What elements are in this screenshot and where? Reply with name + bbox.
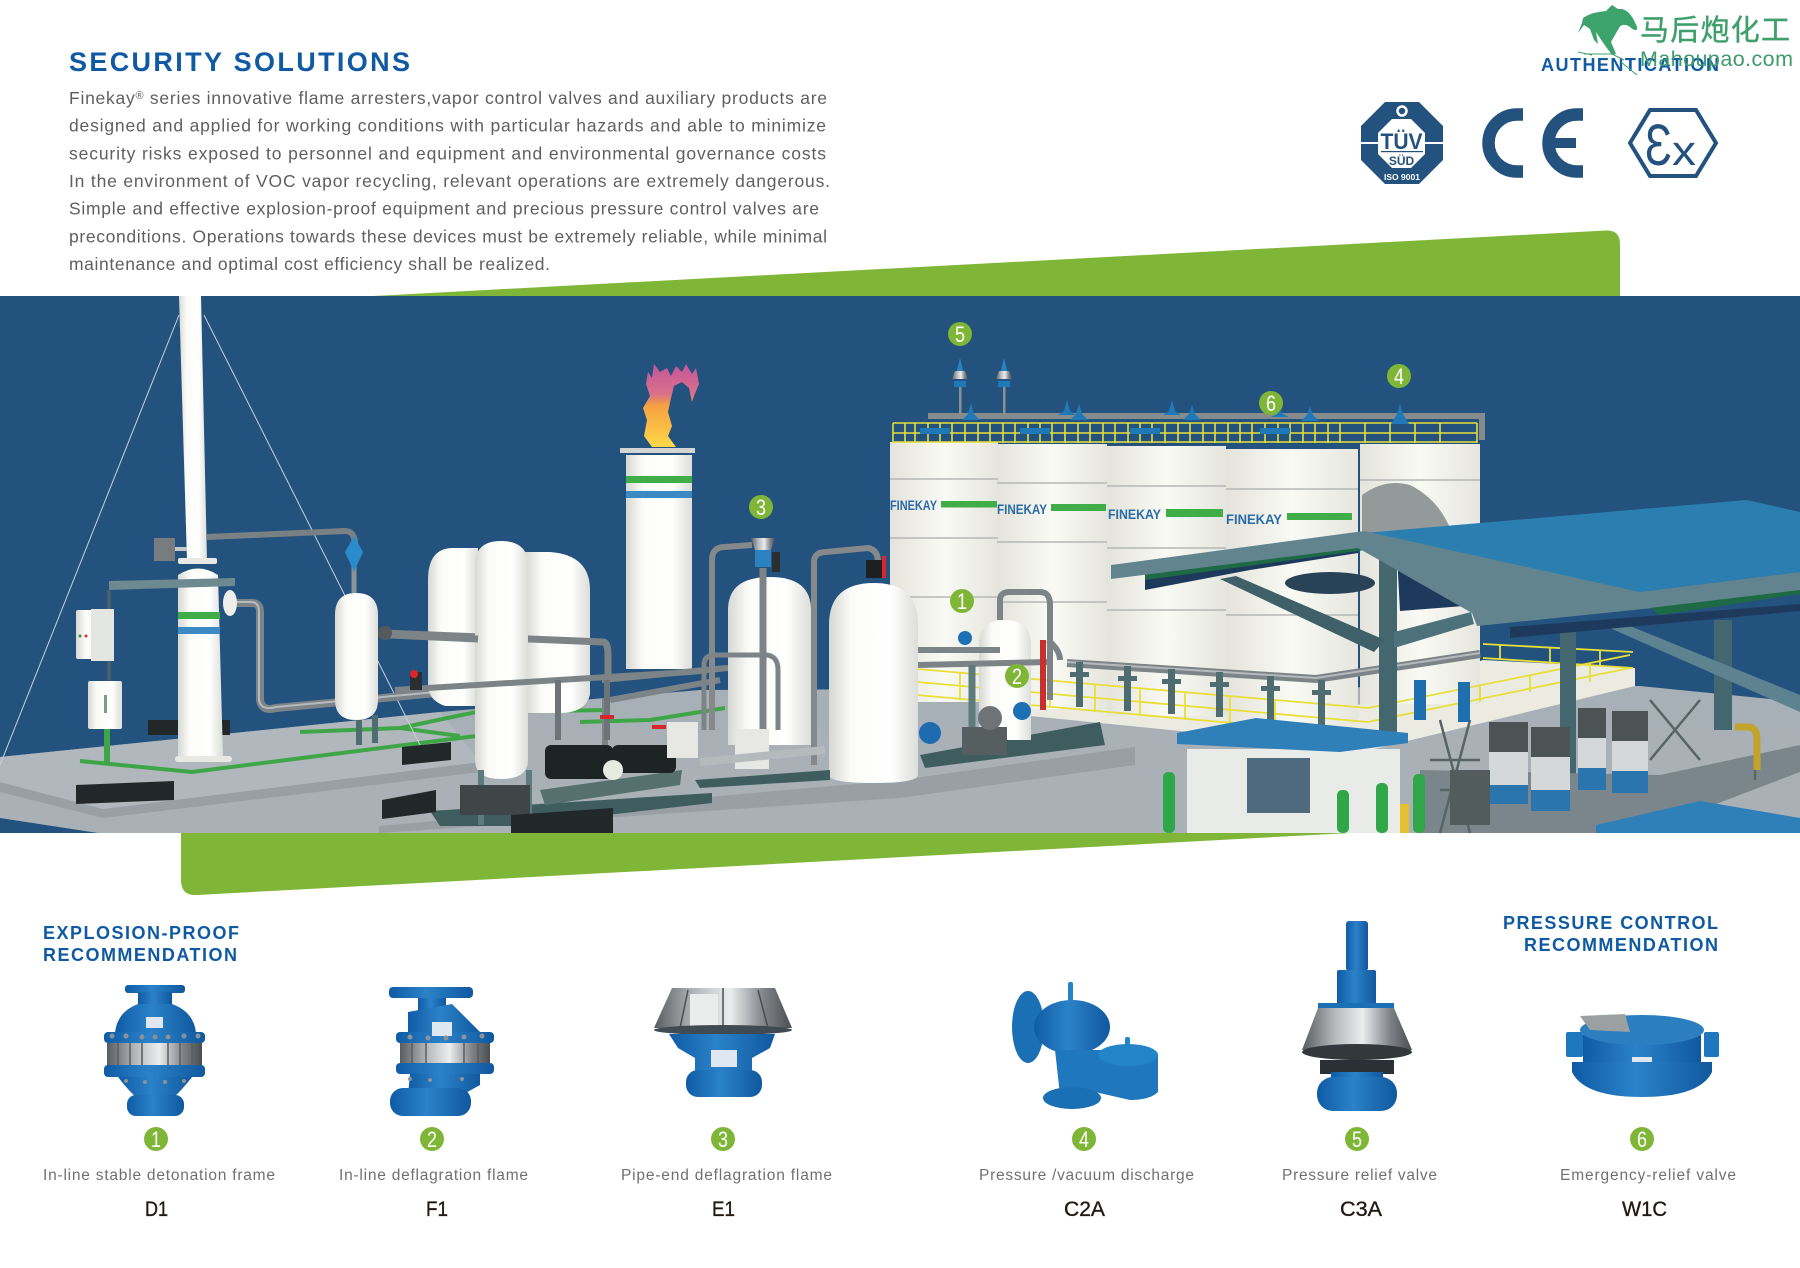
callout 1 [950,589,974,614]
concrete block stacks [76,742,613,833]
badge and text: W1C [1560,1127,1736,1221]
red actuator valve [410,670,422,690]
hero background [0,296,1800,833]
callout 4 [1387,364,1411,389]
badge and text: W1C: W1C [1622,1198,1667,1221]
control panel boxes [76,578,235,729]
heading: pressure control recommendation [1503,913,1718,955]
icon: TUV SUD ISO 9001 badge: SÜD [1389,153,1414,168]
badge and text: C2A [979,1127,1194,1221]
icon: Ex hexagon: x [1672,127,1696,174]
heading: explosion-proof recommendation: RECOMMENDATION [43,945,237,965]
badge and text: F1: 2 [427,1127,437,1152]
guy wires [0,315,179,765]
containment wall [1030,660,1635,750]
icon: TUV SUD ISO 9001 badge [1361,102,1443,184]
callout 4: 4 [1394,364,1404,389]
tank logos: FINEKAY [1226,511,1283,527]
relief valves on vent stems [952,358,1012,415]
badge and text: W1C: Emergency-relief valve [1560,1167,1736,1184]
callout 3: 3 [756,495,766,520]
badge and text: E1: 3 [718,1127,728,1152]
process pipework [395,667,760,745]
icon: Ex hexagon [1630,110,1716,178]
badge and text: D1 [43,1127,275,1221]
ground [0,686,1800,833]
icon: TUV SUD ISO 9001 badge: TÜV [1380,129,1423,154]
badge and text: E1: E1 [712,1198,735,1221]
bollards [1163,772,1425,833]
flare stack and tower [148,296,232,762]
intro text block: designed and applied for working conditions with particular hazards and able to minimize [69,116,826,136]
product: C2A [1012,982,1158,1109]
intro text block: In the environment of VOC vapor recycling, relevant operations are extremely dangerous. [69,171,830,191]
green band: bottom [181,833,1350,895]
icon: Ex hexagon: Ɛ [1645,113,1672,178]
watermark logo [1578,5,1793,75]
storage tanks [890,442,1480,724]
intro text block: maintenance and optimal cost efficiency shall be realized. [69,254,550,274]
icon: TUV SUD ISO 9001 badge: ISO 9001 [1384,172,1420,182]
ground bonding pipes [80,700,725,772]
callout 1: 1 [957,589,967,614]
intro text block [69,88,830,274]
tank-top railings and valves [893,400,1482,443]
flame arrester skid: small vessel and pump [918,592,1105,768]
heading: explosion-proof recommendation [43,923,239,965]
product: D1 [104,985,205,1116]
heading: explosion-proof recommendation: EXPLOSION-PROOF [43,923,239,943]
tank logos: FINEKAY [997,501,1048,517]
badge and text: W1C: 6 [1637,1127,1647,1152]
concrete pads [0,712,1135,833]
front white vessel [829,583,918,783]
badge and text: D1: 1 [151,1127,161,1152]
heading: pressure control recommendation: RECOMMENDATION [1524,935,1718,955]
green band: top [373,230,1620,296]
callout 3 [749,495,773,520]
watermark logo: Mahoupao.com [1640,47,1793,71]
badge and text: D1: In-line stable detonation frame [43,1167,275,1184]
flame [643,364,699,447]
badge and text: F1 [339,1127,528,1221]
blue inline flame arrester on stack line [345,536,363,572]
adsorption vessels [378,541,608,779]
badge and text: C2A: 4 [1079,1127,1089,1152]
badge and text: F1: In-line deflagration flame [339,1167,528,1184]
icon: CE mark [1488,114,1583,172]
product: E1 [654,988,792,1097]
watermark logo: 马后炮化工 [1640,14,1790,47]
piping: stack to vessel [207,531,447,709]
callout 2 [1005,664,1029,689]
guard hut [1177,718,1408,833]
hero illustration: plant [0,296,1800,833]
badge and text: C3A [1282,1127,1437,1221]
product: F1 [389,987,494,1116]
badge and text: E1: Pipe-end deflagration flame [621,1167,832,1184]
tank logos: FINEKAY [890,497,938,513]
callout 6 [1259,391,1283,416]
product: W1C [1566,1014,1719,1097]
intro text block: security risks exposed to personnel and equipment and environmental governance costs [69,143,826,163]
tank logos: FINEKAY [1108,506,1162,522]
tank logos [890,497,1283,527]
small knock-out vessel [335,593,378,745]
pumps and skids [430,655,830,826]
authentication heading: AUTHENTICATION [1541,55,1719,75]
canopy [1111,500,1800,795]
right guy wire [204,315,422,749]
callout 6: 6 [1266,391,1276,416]
callout 2: 2 [1012,664,1022,689]
rear pipe and yellow guard rail [917,644,1633,735]
flare tower [620,364,699,669]
vessel with pipe loop [712,538,886,765]
badge and text: F1: F1 [426,1198,448,1221]
badge and text: C3A: C3A [1340,1198,1382,1221]
callout 5 [948,322,972,347]
badge and text: C3A: 5 [1352,1127,1362,1152]
heading: pressure control recommendation: PRESSURE CONTROL [1503,913,1718,933]
intro text block: ® [135,90,144,102]
intro text block: Simple and effective explosion-proof equipment and precious pressure control valves are [69,199,819,219]
badge and text: C2A: C2A [1064,1198,1105,1221]
badge and text: D1: D1 [145,1198,168,1221]
dispensers and loading equipment [1414,680,1800,833]
intro text block: preconditions. Operations towards these devices must be extremely reliable, while minimal [69,226,827,246]
badge and text: C2A: Pressure /vacuum discharge [979,1167,1194,1184]
white flange [223,590,237,616]
badge and text: E1 [621,1127,832,1221]
title: SECURITY SOLUTIONS [69,47,410,77]
badge and text: C3A: Pressure relief valve [1282,1167,1437,1184]
product: C3A [1302,921,1412,1111]
intro text block: Finekay [69,88,135,108]
blue roof lower right [1596,801,1800,833]
intro text block: series innovative flame arresters,vapor control valves and auxiliary products are [144,88,827,108]
callout 5: 5 [955,322,965,347]
